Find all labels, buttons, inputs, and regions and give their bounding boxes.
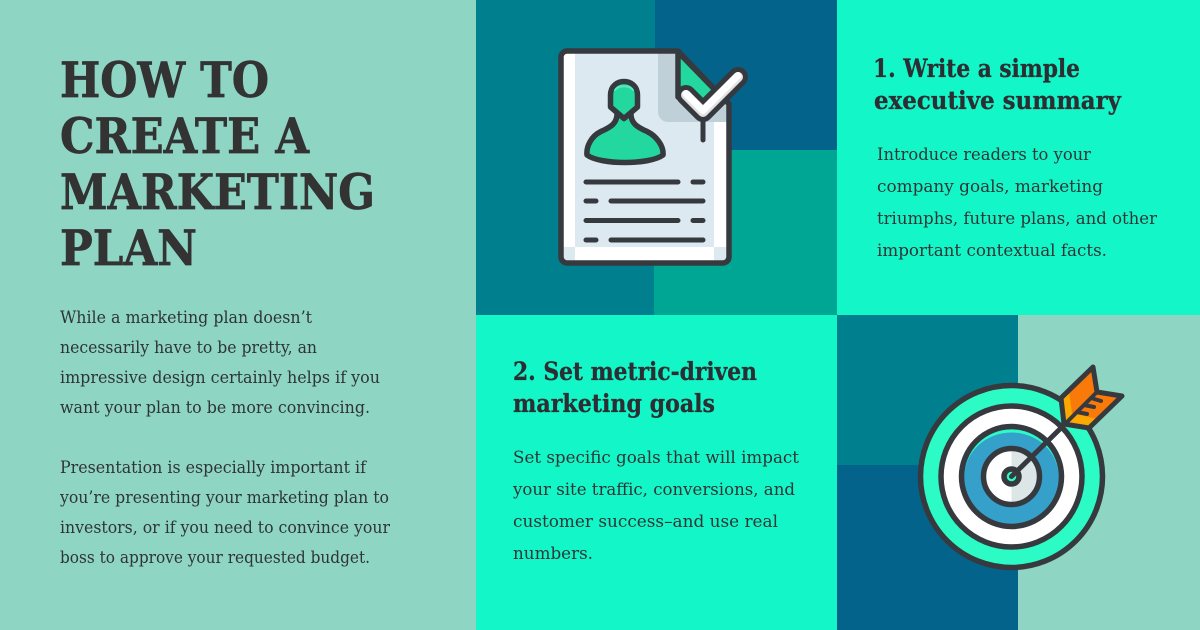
text block: step 2 body: numbers. (513, 544, 593, 564)
panel: step 1 background (837, 0, 1200, 315)
text block: step 1 body: company goals, marketing (877, 177, 1103, 197)
heading: step 1: executive summary (874, 86, 1122, 115)
text block: intro paragraph 2: Presentation is especially important if (60, 458, 368, 478)
title: MARKETING (60, 163, 375, 221)
text block: intro paragraph 2 (59, 458, 391, 568)
text block: step 1 body: triumphs, future plans, and other (877, 209, 1158, 229)
heading: step 1: 1. Write a simple (873, 54, 1080, 83)
text block: step 1 body: Introduce readers to your (877, 145, 1092, 165)
icon: target with arrow (920, 367, 1122, 568)
icon: check mark (686, 76, 738, 112)
panel: target icon background (837, 315, 1200, 630)
text block: step 2 body (512, 448, 799, 564)
text block: step 2 body: Set specific goals that will impact (513, 448, 799, 468)
text block: intro paragraph 1: While a marketing plan doesn’t (60, 308, 312, 328)
text block: step 1 body: important contextual facts. (877, 241, 1107, 261)
heading: step 2: 2. Set metric-driven (513, 357, 757, 386)
text block: intro paragraph 2: boss to approve your requested budget. (60, 548, 370, 568)
text block: step 1 body (877, 145, 1158, 261)
title (60, 51, 375, 277)
title: HOW TO (60, 51, 269, 109)
text block: intro paragraph 2: investors, or if you need to convince your (60, 518, 391, 538)
text block: intro paragraph 2: you’re presenting your marketing plan to (59, 488, 389, 508)
text block: step 2 body: your site traffic, conversions, and (512, 480, 795, 500)
text block: intro paragraph 1: impressive design certainly helps if you (60, 368, 380, 388)
heading: step 2: marketing goals (513, 389, 715, 418)
text block: intro paragraph 1 (60, 308, 380, 418)
title: PLAN (60, 219, 197, 277)
panel: step 2 background (476, 315, 837, 630)
icon: document with person and check mark (561, 51, 738, 263)
text block: intro paragraph 1: necessarily have to be pretty, an (60, 338, 317, 358)
text block: intro paragraph 1: want your plan to be more convincing. (60, 398, 370, 418)
title: CREATE A (60, 107, 310, 165)
text block: step 2 body: customer success–and use real (513, 512, 778, 532)
panel: intro background (0, 0, 476, 630)
heading: step 1 (873, 54, 1122, 115)
icon: document text lines (586, 182, 703, 240)
icon: person (587, 82, 663, 162)
heading: step 2 (513, 357, 757, 418)
panel: document icon background (476, 0, 837, 315)
icon: arrow fletching (1061, 367, 1122, 428)
